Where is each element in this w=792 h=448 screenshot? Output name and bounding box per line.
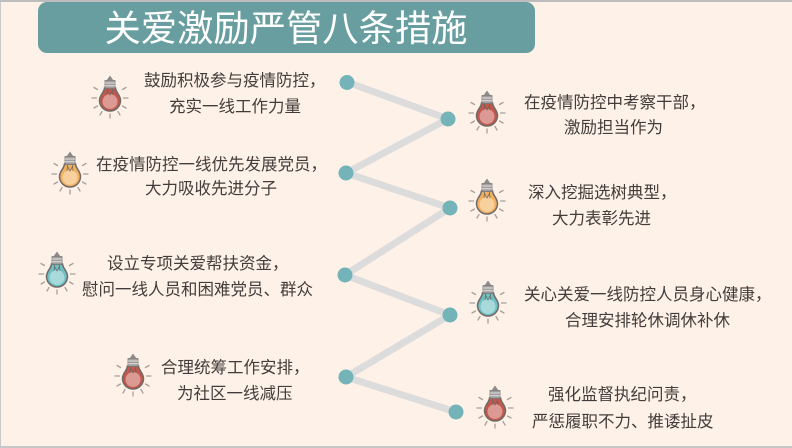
text: measure 8: 强化监督执纪问责，: [548, 386, 696, 404]
text: measure 7: 合理安排轮休调休补休: [565, 312, 730, 330]
title banner: 关爱激励严管八条措施: [104, 8, 467, 49]
text: measure 1: 充实一线工作力量: [169, 98, 301, 116]
icon: red bulb 5: [468, 90, 506, 134]
icon: red bulb 1: [91, 76, 129, 119]
text: measure 2: 在疫情防控一线优先发展党员，: [96, 156, 327, 174]
text: measure 1: 鼓励积极参与疫情防控，: [144, 72, 326, 90]
text: measure 8: 严惩履职不力、推诿扯皮: [532, 413, 714, 431]
text: measure 7: [524, 286, 772, 330]
icon: red bulb 4: [114, 354, 152, 397]
text: measure 2: [96, 156, 327, 198]
text: measure 4: 为社区一线减压: [177, 385, 292, 403]
text: measure 3: [82, 254, 313, 299]
icon: orange bulb 2: [51, 152, 89, 195]
text: measure 6: 深入挖掘选树典型，: [528, 184, 676, 202]
text: measure 6: [528, 184, 676, 228]
text: measure 5: 在疫情防控中考察干部，: [524, 94, 706, 112]
text: measure 8: [532, 386, 714, 431]
text: measure 3: 慰问一线人员和困难党员、群众: [82, 281, 313, 299]
title banner: [38, 2, 535, 53]
icon: teal bulb 3: [38, 252, 76, 295]
text: measure 4: 合理统筹工作安排，: [161, 359, 310, 377]
icon: teal bulb 7: [469, 280, 507, 324]
icon: orange bulb 6: [468, 178, 506, 222]
text: measure 5: [524, 94, 706, 137]
text: measure 2: 大力吸收先进分子: [145, 180, 277, 198]
text: measure 6: 大力表彰先进: [552, 210, 651, 228]
text: measure 5: 激励担当作为: [564, 119, 663, 137]
text: measure 1: [144, 72, 326, 116]
text: measure 4: [161, 358, 310, 403]
text: measure 3: 设立专项关爱帮扶资金，: [107, 255, 288, 273]
icon: red bulb 8: [476, 386, 514, 429]
text: measure 7: 关心关爱一线防控人员身心健康，: [524, 286, 772, 304]
